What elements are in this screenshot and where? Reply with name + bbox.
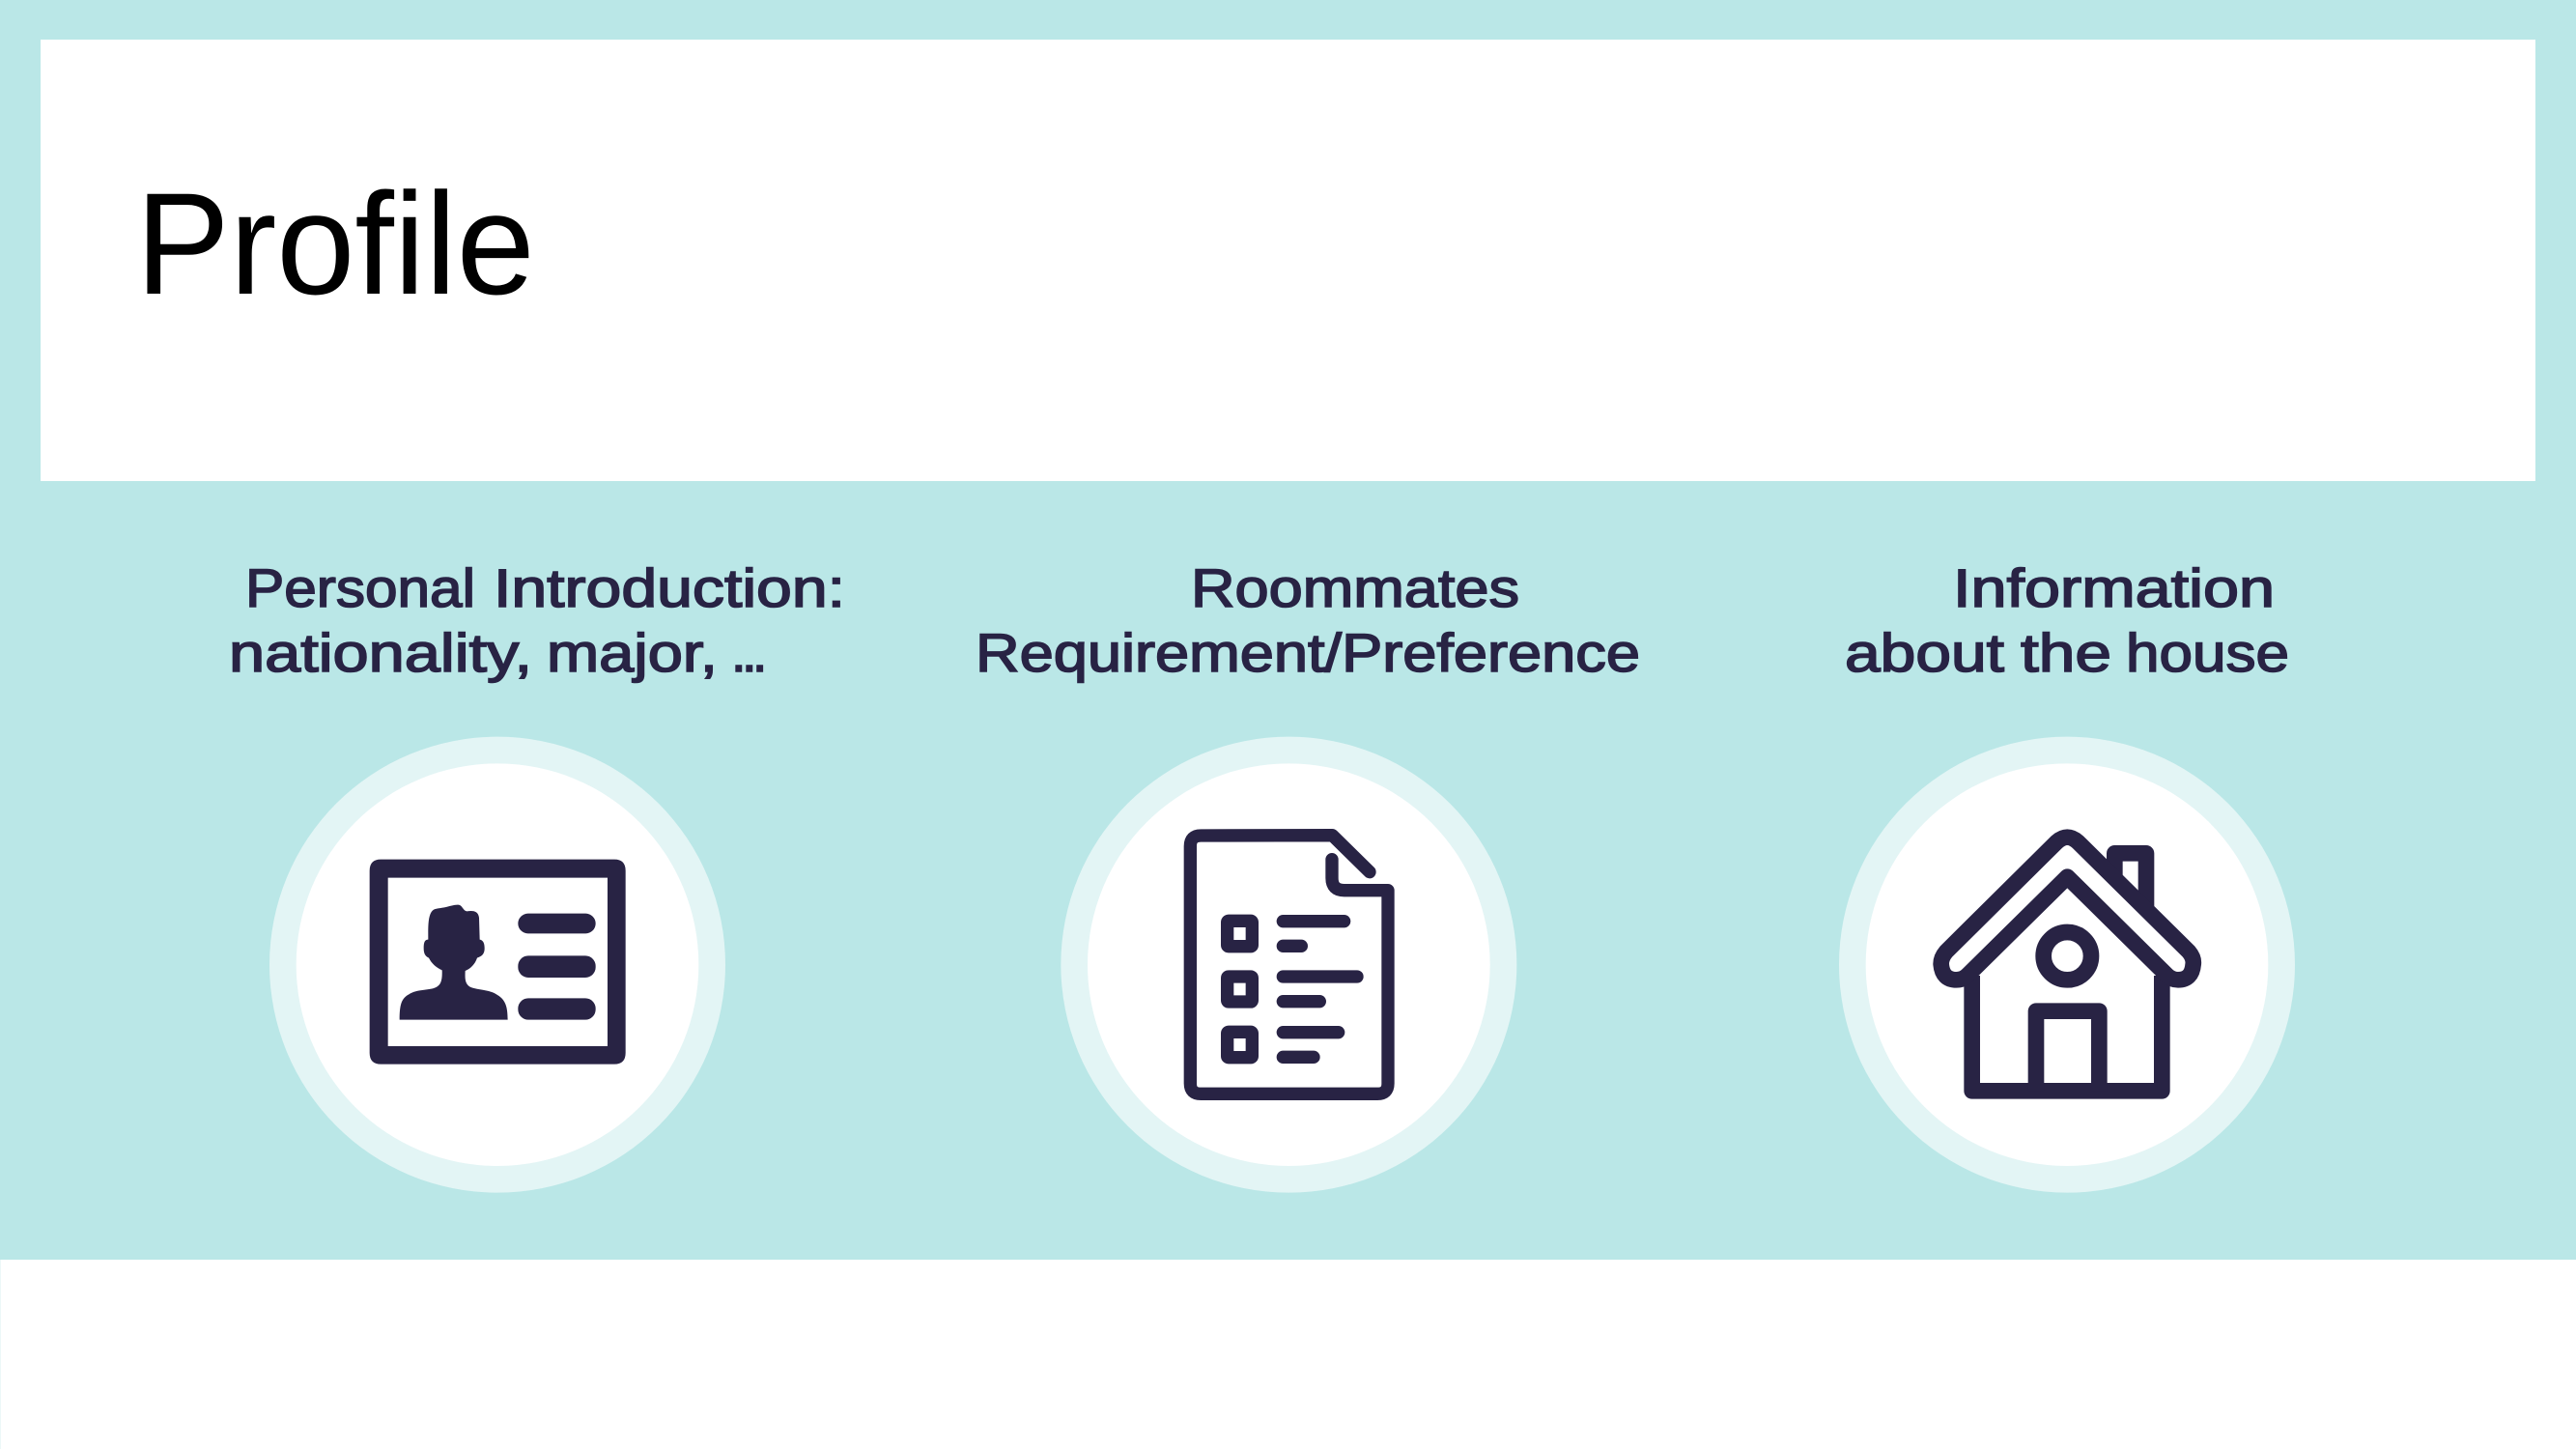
icon: house in circle bbox=[1839, 737, 2295, 1193]
panel: white title panel bbox=[41, 40, 2535, 481]
column: roommates requirement bbox=[976, 557, 1640, 1193]
heading: personal introduction: Introduction: bbox=[494, 557, 845, 618]
heading: roommates requirement: Requirement/Preference bbox=[976, 622, 1640, 683]
icon: checklist document in circle bbox=[1061, 737, 1516, 1193]
heading: personal introduction: nationality, bbox=[229, 622, 532, 683]
column: house information bbox=[1839, 557, 2295, 1193]
heading: roommates requirement: Roommates bbox=[1191, 557, 1519, 618]
heading: personal introduction bbox=[229, 557, 845, 683]
heading: house information: the bbox=[2021, 622, 2111, 683]
icon: id card in circle bbox=[269, 737, 725, 1193]
heading: house information: house bbox=[2126, 622, 2289, 683]
column: personal introduction bbox=[229, 557, 845, 1193]
heading: personal introduction: major, bbox=[547, 622, 718, 683]
heading: personal introduction: ... bbox=[731, 622, 763, 683]
heading: house information: about bbox=[1845, 622, 2005, 683]
heading: house information bbox=[1845, 557, 2289, 683]
heading: personal introduction: Personal bbox=[245, 557, 475, 618]
heading: roommates requirement bbox=[976, 557, 1640, 683]
heading: house information: Information bbox=[1953, 557, 2275, 618]
title: Profile bbox=[135, 163, 535, 325]
